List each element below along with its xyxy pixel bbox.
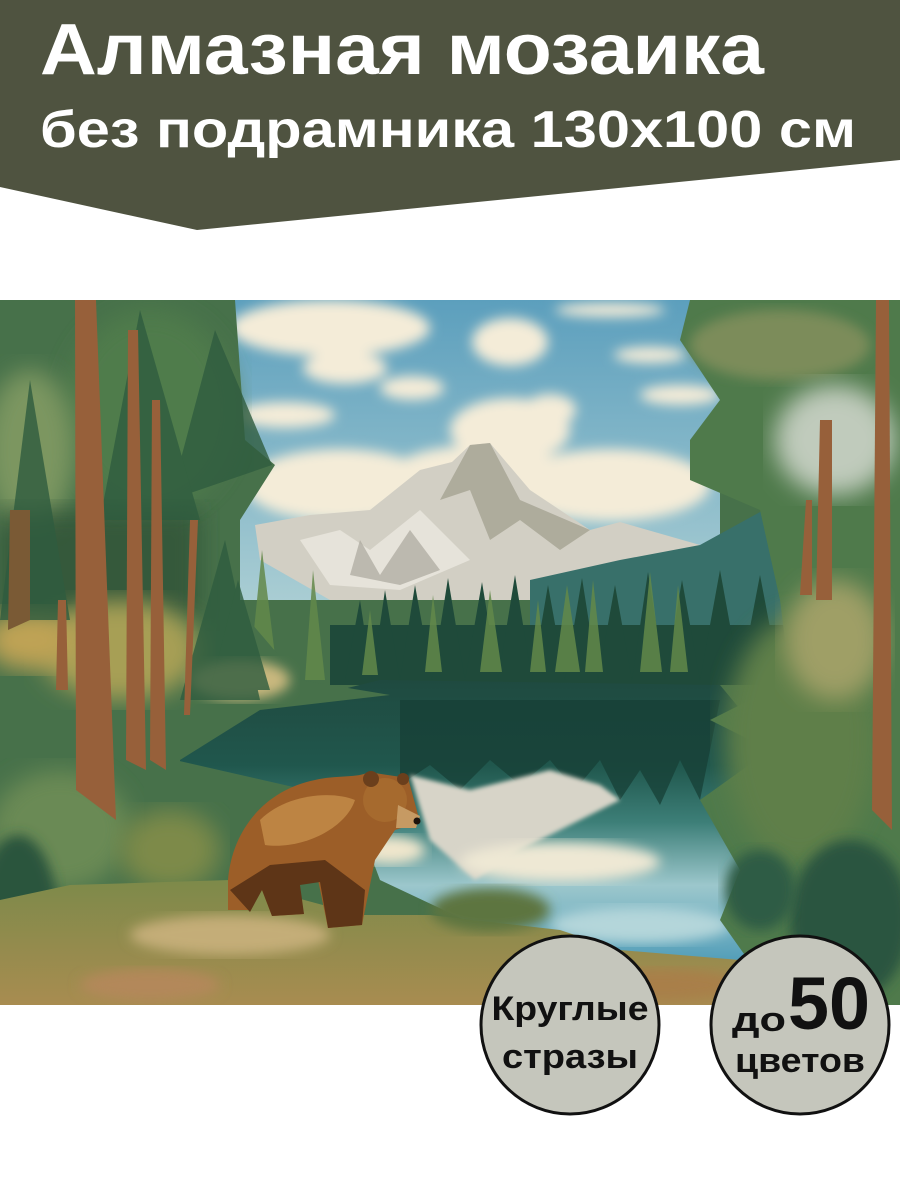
- left tree trunks: [8, 300, 198, 820]
- picture base: [180, 492, 760, 918]
- banner shape: [0, 0, 900, 230]
- treeline: [330, 570, 790, 685]
- reflected trees: [400, 700, 720, 805]
- badge: up to 50 colours: до: [732, 1001, 786, 1039]
- lake: [175, 680, 770, 965]
- bear: [228, 771, 420, 928]
- picture: bear by a mountain lake: [0, 300, 900, 1005]
- left conifers: [0, 310, 272, 700]
- mountains: [255, 443, 700, 600]
- badge: round rhinestones: стразы: [502, 1038, 638, 1076]
- badge: up to 50 colours: [711, 936, 889, 1114]
- foreground ground: [0, 880, 780, 1005]
- badge: up to 50 colours: цветов: [735, 1042, 865, 1080]
- right forest mass: [680, 300, 900, 1005]
- right tree trunks: [800, 300, 892, 830]
- subtitle: без подрамника 130х100 см: [40, 101, 856, 159]
- badge: round rhinestones: Круглые: [492, 990, 648, 1028]
- sky: [200, 300, 720, 600]
- clouds: [230, 300, 720, 521]
- badge: up to 50 colours: 50: [788, 962, 870, 1045]
- far forested hills: [530, 512, 782, 625]
- mountain reflection: [355, 770, 730, 943]
- title: Алмазная мозаика: [40, 10, 765, 90]
- badge: round rhinestones: [481, 936, 659, 1114]
- header banner: [0, 0, 900, 230]
- left forest mass: [175, 300, 390, 761]
